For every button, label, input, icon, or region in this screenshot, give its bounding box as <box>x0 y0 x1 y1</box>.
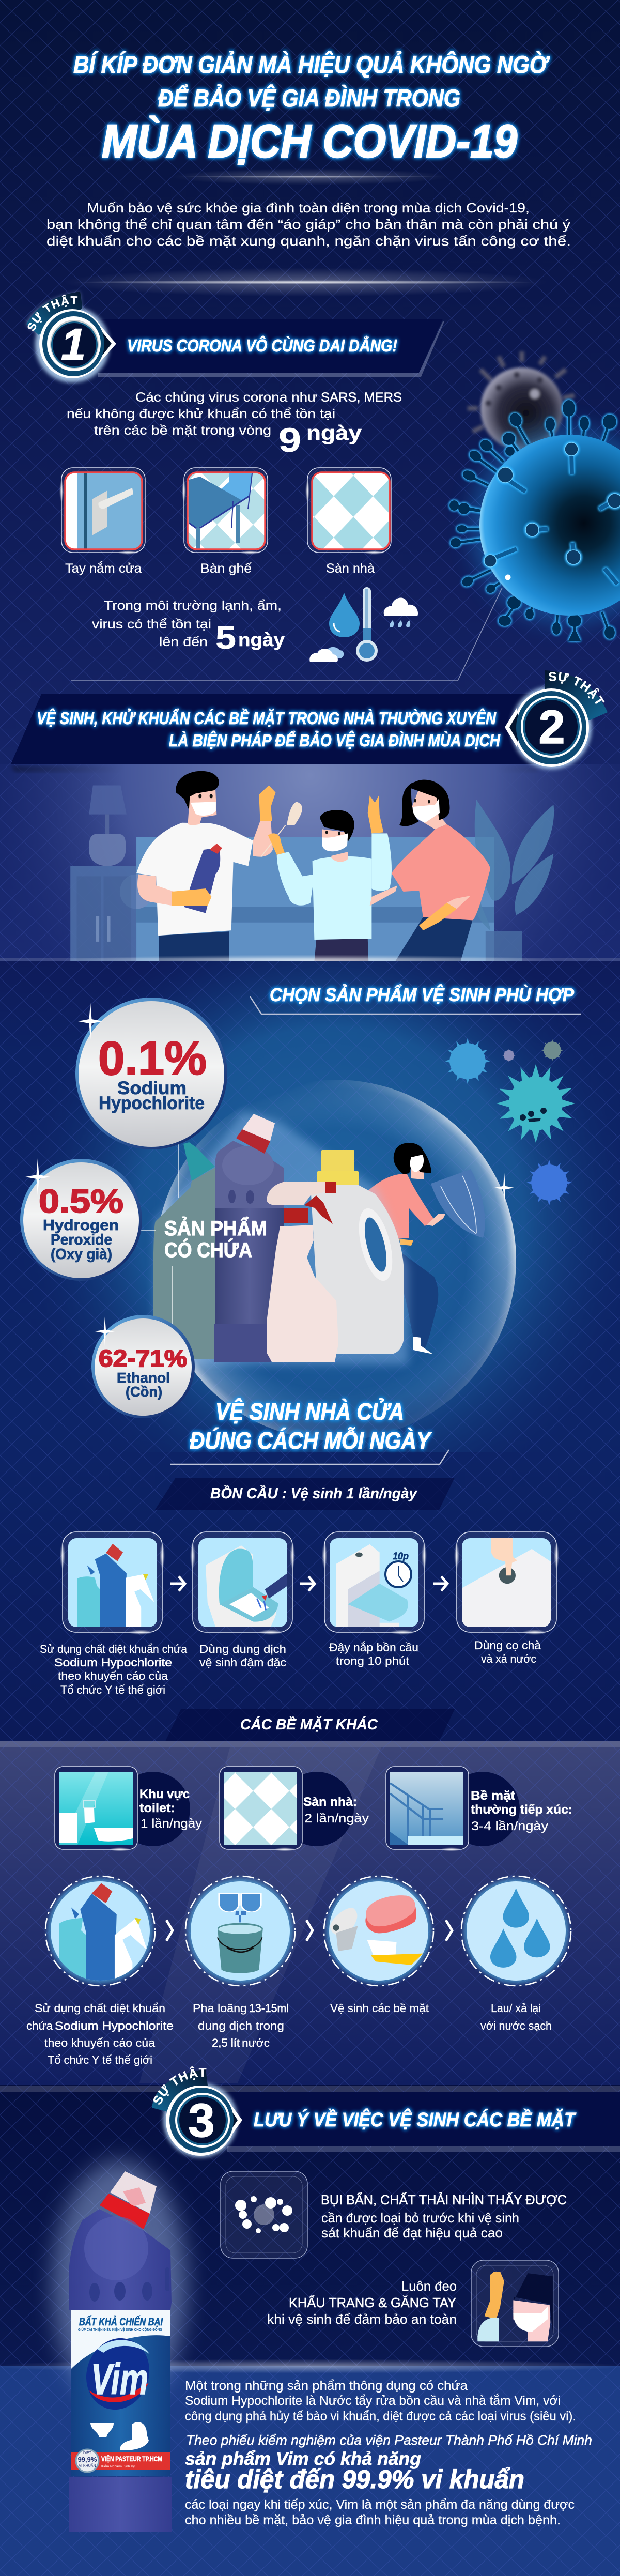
chevron <box>166 1920 173 1941</box>
text: surface frequency: 3-4 lần/ngày <box>471 1819 548 1833</box>
note: mask and gloves: khi vệ sinh để đảm bảo an toàn <box>267 2311 457 2327</box>
circle: 0.1% sodium hypochlorite: Hypochlorite <box>99 1093 205 1113</box>
intro text: bạn không thể chỉ quan tâm đến “áo giáp” cho bản thân mà còn phải chú ý <box>47 217 570 232</box>
chevron <box>446 1920 452 1941</box>
caption: circle step 4: Lau/ xả lại <box>491 2002 541 2015</box>
bottle: blue toilet cleaner <box>214 1114 284 1362</box>
label: products containing <box>164 1216 267 1262</box>
heading: fact 2: VỆ SINH, KHỬ KHUẨN CÁC BỀ MẶT TRONG NHÀ THƯỜNG XUYÊN <box>37 709 497 728</box>
subheading: other surfaces <box>165 1709 455 1741</box>
caption: circle step 4: với nước sạch <box>481 2019 552 2032</box>
virus illustration: large blue virus <box>450 400 620 641</box>
heading: fact 1: VIRUS CORONA VÔ CÙNG DAI DẲNG! <box>127 335 397 355</box>
circle: 0.5% hydrogen peroxide: (Oxy già) <box>51 1246 112 1263</box>
bottle label text: GIÚP CẢI THIỆN ĐIỀU KIỆN VỆ SINH CHO CỘNG ĐỒNG <box>78 2327 162 2332</box>
arrow <box>433 1576 447 1591</box>
subheading: toilet once per day: BỒN CẦU : Vệ sinh 1 lần/ngày <box>210 1484 418 1502</box>
bottle: gray green <box>153 1142 217 1359</box>
tile: toilet area <box>55 1767 202 1851</box>
step 3: close toilet lid 10 minutes: 10p <box>393 1551 409 1562</box>
text: Vim description <box>185 2379 576 2424</box>
icon: dust splatter <box>235 2196 292 2233</box>
heading: choose suitable products <box>250 984 581 1014</box>
intro text: Muốn bảo vệ sức khỏe gia đình toàn diện trong mùa dịch Covid-19, <box>87 200 530 216</box>
text: virus survival 9 days: trên các bề mặt trong vòng <box>94 423 271 438</box>
icon tile: table and chair <box>182 468 268 576</box>
caption: step 1: theo khuyến cáo của <box>58 1669 168 1682</box>
text: Pasteur test result: tiêu diệt đến 99.9% vi khuẩn <box>185 2465 524 2494</box>
bottle label text: 99,9% <box>78 2456 97 2463</box>
caption: circle step 1 <box>26 2002 174 2066</box>
circle: 0.1% sodium hypochlorite: Sodium <box>117 1078 187 1098</box>
text: toilet frequency: toilet: <box>140 1801 175 1815</box>
badge: fact 2: 2 <box>538 701 565 754</box>
bottle logo: Vim <box>91 2355 148 2403</box>
section frame line <box>71 588 502 681</box>
caption: circle step 1: theo khuyến cáo của <box>44 2036 156 2049</box>
caption: circle step 4 <box>481 2002 552 2032</box>
tile: frequently touched surfaces <box>386 1767 572 1851</box>
step 2: pour liquid into toilet <box>190 1532 295 1669</box>
virus surface receptors <box>484 442 620 584</box>
label: products containing: SẢN PHẨM <box>164 1216 267 1240</box>
text: floor frequency: Sàn nhà: <box>303 1795 357 1809</box>
title: MÙA DỊCH COVID-19 <box>102 115 517 167</box>
text: surface frequency: Bề mặt <box>471 1789 515 1803</box>
circle: 0.5% hydrogen peroxide <box>20 1158 142 1281</box>
icon tile: floor <box>305 468 391 576</box>
illustration: woman with shield <box>357 1143 485 1354</box>
illustration: protective bubble <box>156 1080 516 1440</box>
illustration: angry viruses <box>445 1038 575 1205</box>
caption: step 1: Sử dụng chất diệt khuẩn chứa <box>40 1643 188 1655</box>
title: ĐỂ BẢO VỆ GIA ĐÌNH TRONG <box>158 84 460 112</box>
furniture: lamp and cabinet <box>70 785 136 961</box>
caption: step 3 <box>329 1641 419 1667</box>
caption: circle step 1: Sodium Hypochlorite <box>55 2019 174 2032</box>
note: mask and gloves <box>267 2260 559 2347</box>
text: toilet frequency: Khu vực <box>140 1787 190 1801</box>
intro text: diệt khuẩn cho các bề mặt xung quanh, ngăn chặn virus tấn công cơ thể. <box>47 233 571 249</box>
panel: fact 3 banner <box>227 2092 620 2152</box>
circle: 62-71% ethanol: 62-71% <box>99 1345 187 1372</box>
circle: 62-71% ethanol: Ethanol <box>117 1370 170 1386</box>
bottle: spray <box>267 1182 338 1362</box>
bottle label text: Kiểm Nghiệm Định Kỳ <box>101 2465 135 2468</box>
text: Vim description: công dụng phá hủy tế bào vi khuẩn, diệt được cả các loại virus (siêu vi). <box>185 2409 576 2424</box>
text: toilet frequency <box>140 1787 202 1831</box>
note: mask and gloves: Luôn đeo <box>401 2278 457 2294</box>
caption: step 1 <box>40 1643 188 1696</box>
text: virus survival 9 days <box>67 390 402 459</box>
text: virus survival 9 days: ngày <box>306 422 362 444</box>
illustration: family cleaning <box>0 764 620 966</box>
caption: step 4: và xả nước <box>481 1652 536 1665</box>
text: Pasteur test result: sản phẩm Vim có khả năng <box>185 2449 421 2469</box>
caption: step 4: Dùng cọ chà <box>474 1639 541 1652</box>
jug: white detergent <box>311 1150 404 1354</box>
text: surface frequency <box>471 1789 572 1833</box>
circle step 4: rinse <box>461 1876 571 2032</box>
text: cold humid 5 days <box>92 599 285 656</box>
subheading: other surfaces: CÁC BỀ MẶT KHÁC <box>240 1715 378 1733</box>
step 3: close toilet lid 10 minutes <box>322 1532 427 1667</box>
note: mask and gloves: KHẨU TRANG & GĂNG TAY <box>289 2295 456 2310</box>
text: Pasteur test result <box>185 2432 592 2527</box>
caption: circle step 3: Vệ sinh các bề mặt <box>330 2002 429 2015</box>
circle: 0.5% hydrogen peroxide: 0.5% <box>39 1183 123 1220</box>
heading: fact 2: LÀ BIỆN PHÁP ĐỂ BẢO VỆ GIA ĐÌNH MÙA DỊCH <box>169 731 501 750</box>
text: floor frequency <box>303 1795 369 1826</box>
heading: fact 3: LƯU Ý VỀ VIỆC VỆ SINH CÁC BỀ MẶT <box>254 2108 577 2131</box>
caption: circle step 1: Tổ chức Y tế thế giới <box>48 2053 152 2066</box>
circle step 2: dilute <box>185 1876 295 2049</box>
badge: fact 2: SỰ THẬT <box>549 672 605 704</box>
tile: floor <box>220 1767 369 1851</box>
text: cold humid 5 days: lên đến <box>159 635 208 649</box>
caption: step 3: Đậy nắp bồn cầu <box>329 1641 419 1654</box>
arrow <box>171 1576 185 1591</box>
heading: clean home properly every day: ĐÚNG CÁCH MỖI NGÀY <box>190 1427 432 1454</box>
caption: circle step 1: chứa <box>26 2019 53 2032</box>
title <box>73 51 550 167</box>
step 1: disinfectant bottles <box>40 1532 188 1696</box>
subheading: toilet once per day <box>155 1478 455 1510</box>
text: floor frequency: 2 lần/ngày <box>304 1812 369 1826</box>
virus illustration: background dark virus <box>468 351 575 450</box>
bottle label text: BẤT KHẢ CHIẾN BẠI <box>79 2316 163 2328</box>
title: BÍ KÍP ĐƠN GIẢN MÀ HIỆU QUẢ KHÔNG NGỜ <box>73 51 550 78</box>
heading: clean home properly every day <box>171 1398 449 1464</box>
text: virus survival 9 days: 9 <box>278 421 301 459</box>
caption: circle step 2: 13-15ml <box>249 2002 289 2015</box>
label: table and chair: Bàn ghế <box>200 561 252 576</box>
bottle label text: DIỆT <box>83 2450 92 2455</box>
text: cold humid 5 days: ngày <box>238 629 285 650</box>
badge: fact 1 <box>25 290 116 386</box>
callout connectors <box>134 1135 181 1343</box>
circle: 0.1% sodium hypochlorite <box>75 998 227 1149</box>
icon: weather water drop, thermometer and clouds <box>309 587 418 662</box>
heading: clean home properly every day: VỆ SINH NHÀ CỬA <box>215 1398 404 1425</box>
badge: fact 3: SỰ THẬT <box>153 2066 207 2105</box>
arrow <box>300 1576 315 1591</box>
note: visible dirt <box>221 2171 567 2258</box>
caption: circle step 2: Pha loãng <box>193 2002 247 2015</box>
caption: step 2: Dùng dung dịch <box>199 1643 286 1655</box>
caption: step 2: vệ sinh đậm đặc <box>199 1656 286 1669</box>
caption: step 2 <box>199 1643 286 1669</box>
product: Vim bottle <box>53 2160 187 2532</box>
step 4: flush <box>454 1532 559 1665</box>
badge: fact 1: SỰ THẬT <box>28 295 78 331</box>
furniture: sofa <box>120 837 494 961</box>
note: visible dirt: BỤI BẨN, CHẤT THẢI NHÌN THẤY ĐƯỢC <box>321 2192 567 2207</box>
label: products containing: CÓ CHỨA <box>164 1238 252 1262</box>
caption: circle step 2: 2,5 lít <box>212 2036 240 2049</box>
bottle label text <box>76 2316 163 2472</box>
text: virus survival 9 days: Các chủng virus corona như <box>135 390 317 405</box>
text: Pasteur test result: cho nhiều bề mặt, bảo vệ gia đình hiệu quả trong mùa dịch bệnh. <box>185 2513 561 2527</box>
person: father <box>136 771 302 961</box>
caption: circle step 2: nước <box>242 2036 270 2049</box>
text: cold humid 5 days: virus có thể tồn tại <box>92 617 211 632</box>
circle step 3: clean surfaces <box>324 1876 433 2015</box>
text: Pasteur test result: các loại ngay khi tiếp xúc, Vim là một sản phẩm đa năng dùng được <box>185 2497 575 2512</box>
bottle label text: VI KHUẨN <box>79 2463 96 2468</box>
circle: 0.1% sodium hypochlorite: 0.1% <box>98 1032 207 1085</box>
circle step 1: disinfectant <box>26 1876 174 2066</box>
text: cold humid 5 days: Trong môi trường lạnh, ẩm, <box>104 599 282 613</box>
caption: step 1: Sodium Hypochlorite <box>54 1656 172 1669</box>
note: visible dirt: cần được loại bỏ trước khi vệ sinh <box>321 2210 519 2226</box>
heading: fact 2 <box>37 709 501 750</box>
icon: person with mask and glove <box>477 2272 553 2341</box>
text: toilet frequency: 1 lần/ngày <box>141 1817 202 1831</box>
badge: fact 3: 3 <box>188 2094 215 2147</box>
text: virus survival 9 days: nếu không được khử khuẩn có thể tồn tại <box>67 407 335 421</box>
badge: fact 1: 1 <box>61 320 86 370</box>
chevron <box>306 1920 313 1941</box>
circle: 0.5% hydrogen peroxide: Peroxide <box>51 1232 112 1248</box>
badge: fact 3 <box>152 2066 242 2160</box>
circle: 62-71% ethanol: (Cồn) <box>126 1384 162 1400</box>
text: virus survival 9 days: SARS, MERS <box>321 390 402 405</box>
caption: step 1: Tổ chức Y tế thế giới <box>60 1683 165 1696</box>
circle: 62-71% ethanol <box>91 1315 195 1418</box>
plant <box>474 800 554 961</box>
person: mother <box>370 780 490 961</box>
text: surface frequency: thường tiếp xúc: <box>471 1803 572 1817</box>
note: visible dirt: sát khuẩn để đạt hiệu quả cao <box>321 2225 503 2241</box>
circle: 0.5% hydrogen peroxide: Hydrogen <box>43 1217 119 1234</box>
bottle label text: VIỆN PASTEUR TP.HCM <box>101 2454 162 2463</box>
badge: fact 2 <box>505 670 608 772</box>
text: Vim description: Một trong những sản phẩm thông dụng có chứa <box>185 2379 468 2393</box>
text: Pasteur test result: Theo phiếu kiểm nghiệm của viện Pasteur Thành Phố Hồ Chí Minh <box>186 2432 592 2448</box>
panel: fact 2 banner <box>10 694 542 772</box>
person: child <box>268 795 392 961</box>
icon tile: door handle <box>59 468 145 576</box>
label: door handle: Tay nắm cửa <box>65 561 142 576</box>
caption: step 4 <box>474 1639 541 1665</box>
caption: step 3: trong 10 phút <box>336 1654 409 1667</box>
caption: circle step 2 <box>193 2002 289 2049</box>
illustration: cleaning product bottles <box>153 1111 408 1364</box>
panel: fact 1 banner <box>98 319 444 377</box>
intro text <box>47 200 571 249</box>
text: cold humid 5 days: 5 <box>215 620 236 656</box>
caption: circle step 2: dung dịch trong <box>198 2019 284 2032</box>
heading: choose suitable products: CHỌN SẢN PHẨM VỆ SINH PHÙ HỢP <box>270 984 575 1005</box>
bottle logo <box>77 2330 159 2418</box>
text: Vim description: Sodium Hypochlorite là Nước tẩy rửa bồn cầu và nhà tắm Vim, với <box>185 2393 561 2408</box>
caption: circle step 1: Sử dụng chất diệt khuẩn <box>35 2002 165 2015</box>
label: floor: Sàn nhà <box>326 561 375 576</box>
